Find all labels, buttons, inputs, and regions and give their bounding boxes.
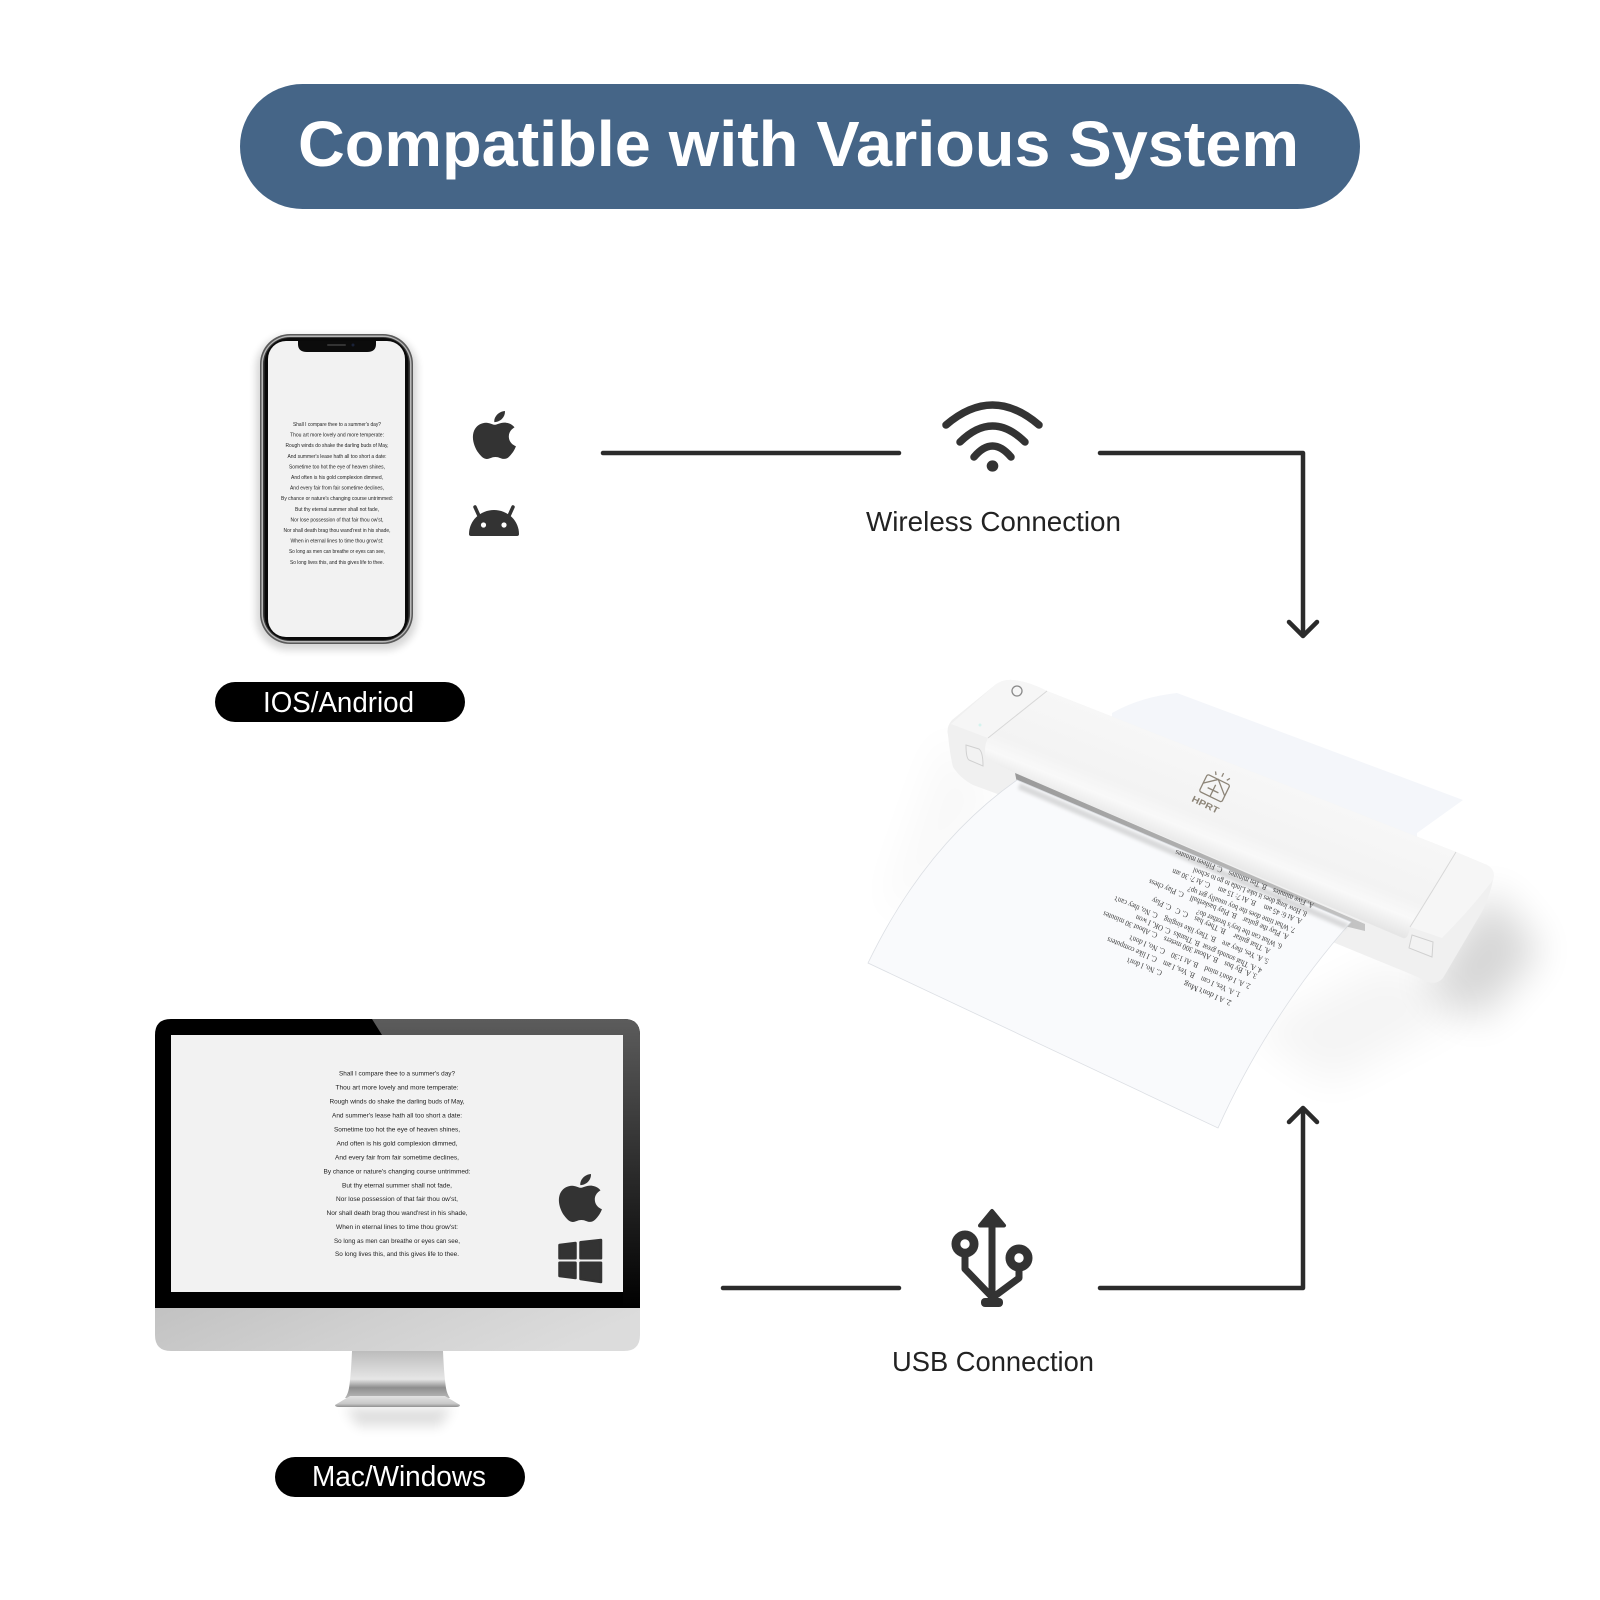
logo: HPRT [1190, 767, 1233, 816]
title banner: Compatible with Various System [298, 108, 1299, 180]
phone poem text: Rough winds do shake the darling buds of May, [286, 443, 388, 449]
monitor poem text: Nor shall death brag thou wand'rest in his shade, [326, 1210, 468, 1217]
monitor poem text: Sometime too hot the eye of heaven shines, [334, 1126, 460, 1133]
printed text: 8. How long does it take Linda to go to school [1191, 865, 1308, 918]
monitor poem text: Rough winds do shake the darling buds of May, [330, 1098, 465, 1105]
rear paper [1112, 693, 1463, 850]
printed text: 3. A. By bus B. About 300 meters C. About 30 minutes [1102, 909, 1258, 981]
phone poem text: And summer's lease hath all too short a date: [288, 454, 386, 460]
phone poem text: So long as men can breathe or eyes can see, [289, 549, 385, 555]
printed text: 2. A. I don't mind B. At 1:30 C. No, I don't [1127, 933, 1252, 991]
side buttons [966, 745, 1433, 957]
monitor poem text: By chance or nature's changing course untrimmed: [324, 1168, 471, 1175]
label: Mac/Windows [275, 1457, 525, 1497]
printed text: 2. A I don't Mug [1182, 979, 1233, 1007]
monitor poem text: Thou art more lovely and more temperate: [336, 1084, 459, 1092]
printed text: A. At 6: 45 am B. At 7: 15 am C. At 7: 30 am [1170, 867, 1303, 926]
monitor poem text: So long lives this, and this gives life to thee. [335, 1251, 459, 1258]
monitor poem text: When in eternal lines to time thou grow'st: [336, 1224, 458, 1231]
phone poem text: Shall I compare thee to a summer's day? [293, 422, 381, 428]
label: IOS/Andriod: IOS/Andriod [263, 687, 414, 719]
monitor poem text [324, 1070, 471, 1258]
monitor poem text: And often is his gold complexion dimmed, [336, 1140, 458, 1147]
phone poem text: Nor lose possession of that fair thou ow'st, [290, 517, 384, 523]
printed text: 4. A. That sounds great B. Thanks C. OK, I won [1134, 913, 1263, 975]
monitor chin [155, 1308, 640, 1351]
phone poem text: Thou art more lovely and more temperate: [290, 433, 384, 439]
printer end cap tops [951, 680, 1494, 938]
power indicator [1012, 686, 1022, 696]
phone poem text: So long lives this, and this gives life to thee. [290, 560, 384, 566]
phone poem text: And often is his gold complexion dimmed, [291, 475, 383, 481]
smartphone [256, 334, 417, 650]
label: wireless connection: Wireless Connection [866, 506, 1121, 537]
monitor poem text: Nor lose possession of that fair thou ow'st, [336, 1196, 458, 1203]
phone poem text: Nor shall death brag thou wand'rest in his shade, [284, 528, 390, 534]
arrow: wireless connection line [603, 453, 1317, 636]
icon: apple (desktop) [559, 1174, 602, 1222]
status light [978, 724, 982, 726]
icon: android [469, 507, 519, 536]
printed text: A. Five minutes B. Ten minutes C. Fifteen minutes [1174, 848, 1315, 910]
printed text: 6. What can the boy's brother do? [1195, 907, 1283, 951]
printer body [948, 680, 1494, 983]
icon: apple (mobile) [473, 411, 516, 459]
logo: HPRT: HPRT [1190, 794, 1221, 816]
printed text: 1. A. Yes, I can B. Yes, I am C. I like computers [1106, 935, 1242, 999]
printed text: A. That guitar B. They has C. C C. Play [1150, 896, 1272, 956]
arrow: usb connection line [723, 1108, 1317, 1288]
printed text: 5. A. Yes, they are B. They like singing C. No, they can't [1112, 894, 1270, 966]
monitor poem text: And every fair from fair sometime declines, [335, 1154, 459, 1161]
phone poem text: When in eternal lines to time thou grow'st: [290, 539, 384, 545]
phone poem text: Sometime too hot the eye of heaven shines, [289, 464, 385, 470]
label: IOS/Andriod [215, 682, 465, 722]
label: Mac/Windows: Mac/Windows [312, 1461, 486, 1493]
icon: windows [560, 1240, 601, 1282]
phone poem text: And every fair from fair sometime declines, [290, 486, 384, 492]
phone poem text [281, 422, 393, 566]
monitor screen [171, 1035, 623, 1292]
monitor poem text: Shall I compare thee to a summer's day? [339, 1070, 455, 1078]
printer [868, 680, 1540, 1128]
printed sheet [868, 780, 1351, 1128]
monitor poem text: So long as men can breathe or eyes can see, [334, 1238, 460, 1245]
monitor poem text: And summer's lease hath all too short a date: [332, 1112, 462, 1119]
icon: usb [956, 1211, 1028, 1307]
printed text: C. No, I don't [1125, 956, 1163, 978]
monitor stand [335, 1351, 460, 1407]
label: usb connection: USB Connection [892, 1346, 1094, 1377]
title banner [240, 84, 1360, 209]
monitor poem text: But thy eternal summer shall not fade, [342, 1182, 452, 1189]
printer lid [985, 691, 1456, 938]
phone poem text: By chance or nature's changing course untrimmed: [281, 496, 393, 502]
monitor bezel [155, 1019, 640, 1308]
phone poem text: But thy eternal summer shall not fade, [295, 507, 379, 513]
slot shadow on sheet [1018, 783, 1349, 929]
printed text: 7. What time does the boy usually get up? [1186, 884, 1297, 935]
paper slot [1015, 773, 1365, 931]
printed text [1102, 848, 1315, 1007]
printer shadow [885, 730, 1540, 1085]
printed text: A. Play the guitar B. Play basketball C. Play chess [1147, 877, 1290, 941]
icon: wifi [946, 405, 1039, 472]
monitor shadow [345, 1408, 452, 1426]
computer monitor [155, 1019, 640, 1426]
